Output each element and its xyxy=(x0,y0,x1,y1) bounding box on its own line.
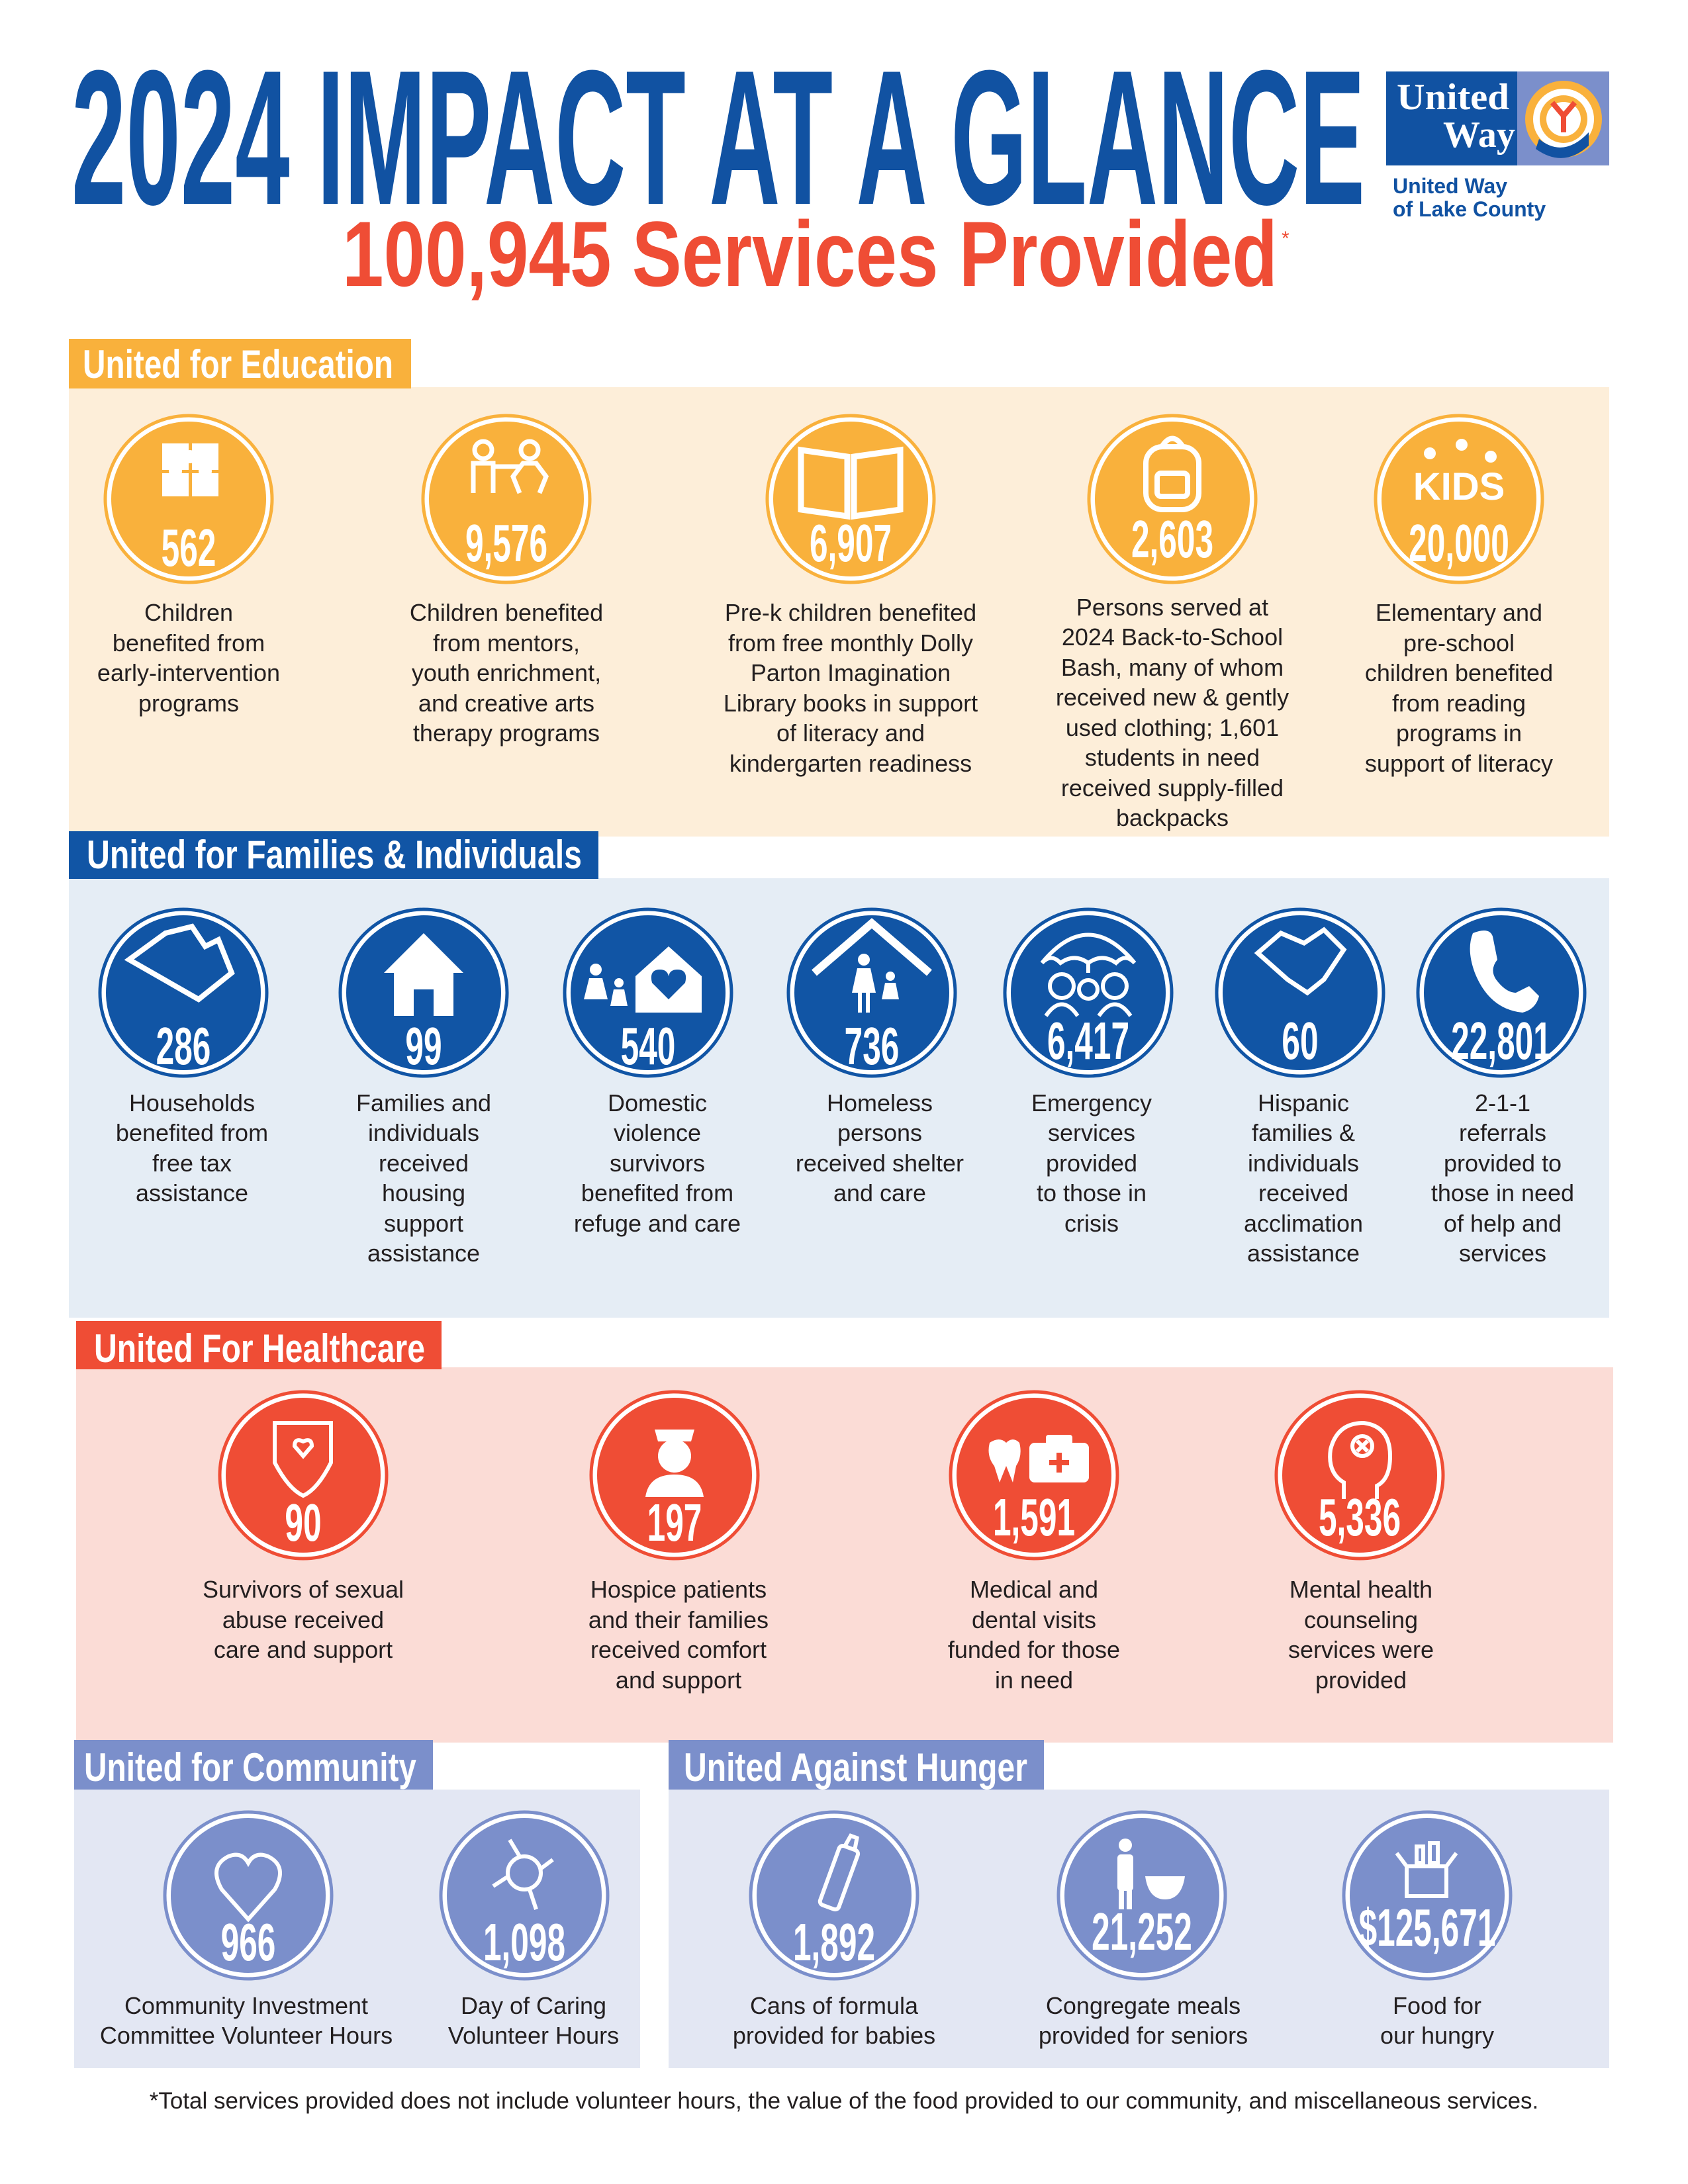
logo: United Way of Lake County: of Lake County xyxy=(1393,197,1546,221)
stat: 197: and support xyxy=(616,1666,741,1694)
stat: 5,336 xyxy=(1276,1392,1443,1694)
stat: 562: Children xyxy=(144,599,233,626)
tab: healthcare heading: United For Healthcare xyxy=(94,1326,425,1371)
stat: 6,417 xyxy=(1005,909,1172,1237)
stat: 22,801: provided to xyxy=(1444,1150,1562,1177)
stat: 1,098: Day of Caring xyxy=(461,1992,606,2019)
stat: 60 xyxy=(1217,909,1383,1267)
stat: $125,671: Food for xyxy=(1393,1992,1481,2019)
stat: 22,801: of help and xyxy=(1444,1210,1562,1237)
logo: United Way of Lake County: United Way xyxy=(1393,174,1507,198)
stat: 9,576: therapy programs xyxy=(413,719,600,747)
stat: 6,417: Emergency xyxy=(1031,1089,1152,1116)
stat: $125,671: $125,671 xyxy=(1359,1899,1495,1958)
stat: 197: and their families xyxy=(588,1606,769,1633)
stat: 22,801: 22,801 xyxy=(1451,1012,1552,1071)
stat: 562: programs xyxy=(138,690,239,717)
stat: 90: care and support xyxy=(214,1636,393,1663)
stat: 736: received shelter xyxy=(796,1150,964,1177)
stat: 21,252: 21,252 xyxy=(1092,1903,1192,1962)
stat: 286: Households xyxy=(129,1089,255,1116)
stat: 1,098: Volunteer Hours xyxy=(448,2022,619,2049)
stat: 1,591: Medical and xyxy=(970,1576,1098,1603)
stat: 6,907: Library books in support xyxy=(724,690,978,717)
stat: 286: benefited from xyxy=(116,1119,268,1146)
stat: 736: Homeless xyxy=(827,1089,933,1116)
stat: 562: early-intervention xyxy=(97,659,280,686)
stat: 2,603: backpacks xyxy=(1116,804,1229,831)
stat: 90: abuse received xyxy=(222,1606,384,1633)
stat: 966 xyxy=(100,1812,393,2049)
stat: 286 xyxy=(100,909,268,1206)
stat: 540 xyxy=(565,909,741,1237)
stat: 21,252: provided for seniors xyxy=(1039,2022,1248,2049)
stat: 5,336: Mental health xyxy=(1289,1576,1432,1603)
stat: 966: Community Investment xyxy=(124,1992,368,2019)
stat: 1,591: funded for those xyxy=(948,1636,1120,1663)
stat: 5,336: 5,336 xyxy=(1319,1488,1401,1547)
stat: 6,907: from free monthly Dolly xyxy=(728,629,973,657)
stat: 1,892 xyxy=(733,1812,935,2049)
stat: 1,892: 1,892 xyxy=(793,1913,875,1972)
stat: 562: 562 xyxy=(162,519,216,578)
stat: 6,907: of literacy and xyxy=(776,719,925,747)
panel: healthcare xyxy=(76,1321,1613,1743)
stat: 20,000 xyxy=(1365,416,1553,777)
stat: 2,603 xyxy=(1056,416,1289,831)
stat: 99: support xyxy=(384,1210,463,1237)
tab: families heading: United for Families & Individuals xyxy=(87,833,582,877)
stat: 22,801: 2-1-1 xyxy=(1475,1089,1530,1116)
stat: 6,417: 6,417 xyxy=(1047,1012,1129,1071)
stat: 1,098 xyxy=(441,1812,619,2049)
stat: 286: free tax xyxy=(152,1150,232,1177)
stat: 99: Families and xyxy=(356,1089,491,1116)
stat: 197: 197 xyxy=(647,1494,702,1553)
stat: 60: received xyxy=(1258,1179,1348,1206)
subtitle: 100,945 Services Provided xyxy=(342,202,1278,306)
stat: 99: 99 xyxy=(405,1017,442,1076)
stat: 21,252 xyxy=(1039,1812,1248,2049)
stat: 6,417: provided xyxy=(1046,1150,1137,1177)
stat: 540: survivors xyxy=(610,1150,705,1177)
stat: 90: 90 xyxy=(285,1494,322,1553)
stat: 562: benefited from xyxy=(113,629,265,657)
logo: United Way of Lake County xyxy=(1386,71,1609,221)
stat: 99: assistance xyxy=(367,1240,480,1267)
stat: 6,417: services xyxy=(1048,1119,1135,1146)
stat: 540: 540 xyxy=(621,1017,675,1076)
stat: 2,603: Bash, many of whom xyxy=(1061,654,1284,681)
stat: 1,892: Cans of formula xyxy=(750,1992,919,2019)
stat: 1,591 xyxy=(948,1392,1120,1694)
stat: 6,907 xyxy=(724,416,978,777)
stat: 1,892: provided for babies xyxy=(733,2022,935,2049)
stat: $125,671 xyxy=(1344,1812,1511,2049)
stat: 966: Committee Volunteer Hours xyxy=(100,2022,393,2049)
stat: 60: Hispanic xyxy=(1258,1089,1349,1116)
stat: 197 xyxy=(588,1392,769,1694)
stat: 20,000: from reading xyxy=(1392,690,1526,717)
stat: 21,252: Congregate meals xyxy=(1046,1992,1241,2019)
stat: 736: persons xyxy=(837,1119,922,1146)
stat: 9,576: and creative arts xyxy=(418,690,594,717)
stat: 9,576: youth enrichment, xyxy=(412,659,601,686)
stat: 20,000: children benefited xyxy=(1365,659,1553,686)
stat: 90: Survivors of sexual xyxy=(203,1576,404,1603)
stat: 1,098: 1,098 xyxy=(483,1913,565,1972)
stat: 99 xyxy=(340,909,507,1267)
tab: hunger heading: United Against Hunger xyxy=(684,1745,1027,1790)
stat: 60: individuals xyxy=(1248,1150,1359,1177)
stat: 2,603: Persons served at xyxy=(1076,594,1268,621)
stat: 5,336: counseling xyxy=(1304,1606,1418,1633)
stat: 60: families & xyxy=(1252,1119,1355,1146)
stat: 286: assistance xyxy=(136,1179,248,1206)
stat: 9,576 xyxy=(410,416,603,747)
stat: 22,801: services xyxy=(1459,1240,1546,1267)
stat: $125,671: our hungry xyxy=(1380,2022,1494,2049)
stat: 22,801: those in need xyxy=(1431,1179,1574,1206)
stat: 20,000: 20,000 xyxy=(1409,514,1509,573)
stat: 540: Domestic xyxy=(608,1089,707,1116)
stat: 286: 286 xyxy=(156,1017,211,1076)
stat: 2,603: used clothing; 1,601 xyxy=(1066,714,1279,741)
stat: 736 xyxy=(788,909,964,1206)
stat: 1,591: 1,591 xyxy=(993,1488,1075,1547)
panel: community xyxy=(74,1740,640,2068)
stat: 99: individuals xyxy=(368,1119,479,1146)
stat: 6,417: crisis xyxy=(1064,1210,1119,1237)
stat: 1,591: in need xyxy=(995,1666,1073,1694)
stat: 5,336: provided xyxy=(1315,1666,1407,1694)
stat: 6,907: 6,907 xyxy=(810,514,892,573)
stat: 9,576: Children benefited xyxy=(410,599,603,626)
stat: 20,000: Elementary and xyxy=(1376,599,1542,626)
logo: United Way of Lake County: United xyxy=(1397,77,1509,118)
stat: 2,603: 2024 Back-to-School xyxy=(1062,623,1283,651)
footnote: *Total services provided does not include volunteer hours, the value of the food provided to our community, and miscellaneous services. xyxy=(150,2088,1538,2114)
stat: 6,907: Parton Imagination xyxy=(751,659,951,686)
stat: 9,576: 9,576 xyxy=(465,514,547,573)
stat: 2,603: received supply-filled xyxy=(1061,774,1284,801)
stat: 736: and care xyxy=(833,1179,926,1206)
stat: 966: 966 xyxy=(221,1913,275,1972)
panel: education xyxy=(69,339,1609,837)
stat: 197: received comfort xyxy=(590,1636,767,1663)
stat: 60: acclimation xyxy=(1244,1210,1363,1237)
stat: 736: 736 xyxy=(845,1017,899,1076)
stat: 60: 60 xyxy=(1282,1012,1319,1071)
stat: 2,603: 2,603 xyxy=(1131,510,1213,569)
stat: 1,591: dental visits xyxy=(972,1606,1096,1633)
stat: 540: benefited from xyxy=(581,1179,733,1206)
stat: 20,000: support of literacy xyxy=(1365,750,1553,777)
stat: 6,907: kindergarten readiness xyxy=(729,750,972,777)
stat: 540: violence xyxy=(614,1119,701,1146)
stat: 9,576: from mentors, xyxy=(433,629,580,657)
stat: 60: assistance xyxy=(1247,1240,1360,1267)
stat: 2,603: received new & gently xyxy=(1056,684,1289,711)
stat: 99: housing xyxy=(382,1179,465,1206)
stat: 22,801 xyxy=(1418,909,1585,1267)
stat: 562 xyxy=(97,416,280,717)
logo: United Way of Lake County: Way xyxy=(1443,114,1515,156)
panel: hunger xyxy=(669,1740,1609,2068)
stat: 5,336: services were xyxy=(1288,1636,1434,1663)
stat: 99: received xyxy=(379,1150,469,1177)
stat: 90 xyxy=(203,1392,404,1663)
stat: 540: refuge and care xyxy=(574,1210,741,1237)
stat: 197: Hospice patients xyxy=(590,1576,767,1603)
panel: families xyxy=(69,831,1609,1318)
stat: 20,000: KIDS xyxy=(1413,465,1505,508)
stat: 20,000: programs in xyxy=(1396,719,1522,747)
stat: 22,801: referrals xyxy=(1459,1119,1546,1146)
stat: 6,417: to those in xyxy=(1037,1179,1147,1206)
tab: community heading: United for Community xyxy=(84,1745,416,1790)
stat: 2,603: students in need xyxy=(1085,744,1260,771)
tab: education heading: United for Education xyxy=(83,342,393,387)
subtitle: * xyxy=(1282,228,1289,250)
stat: 6,907: Pre-k children benefited xyxy=(725,599,976,626)
stat: 20,000: pre-school xyxy=(1403,629,1515,657)
